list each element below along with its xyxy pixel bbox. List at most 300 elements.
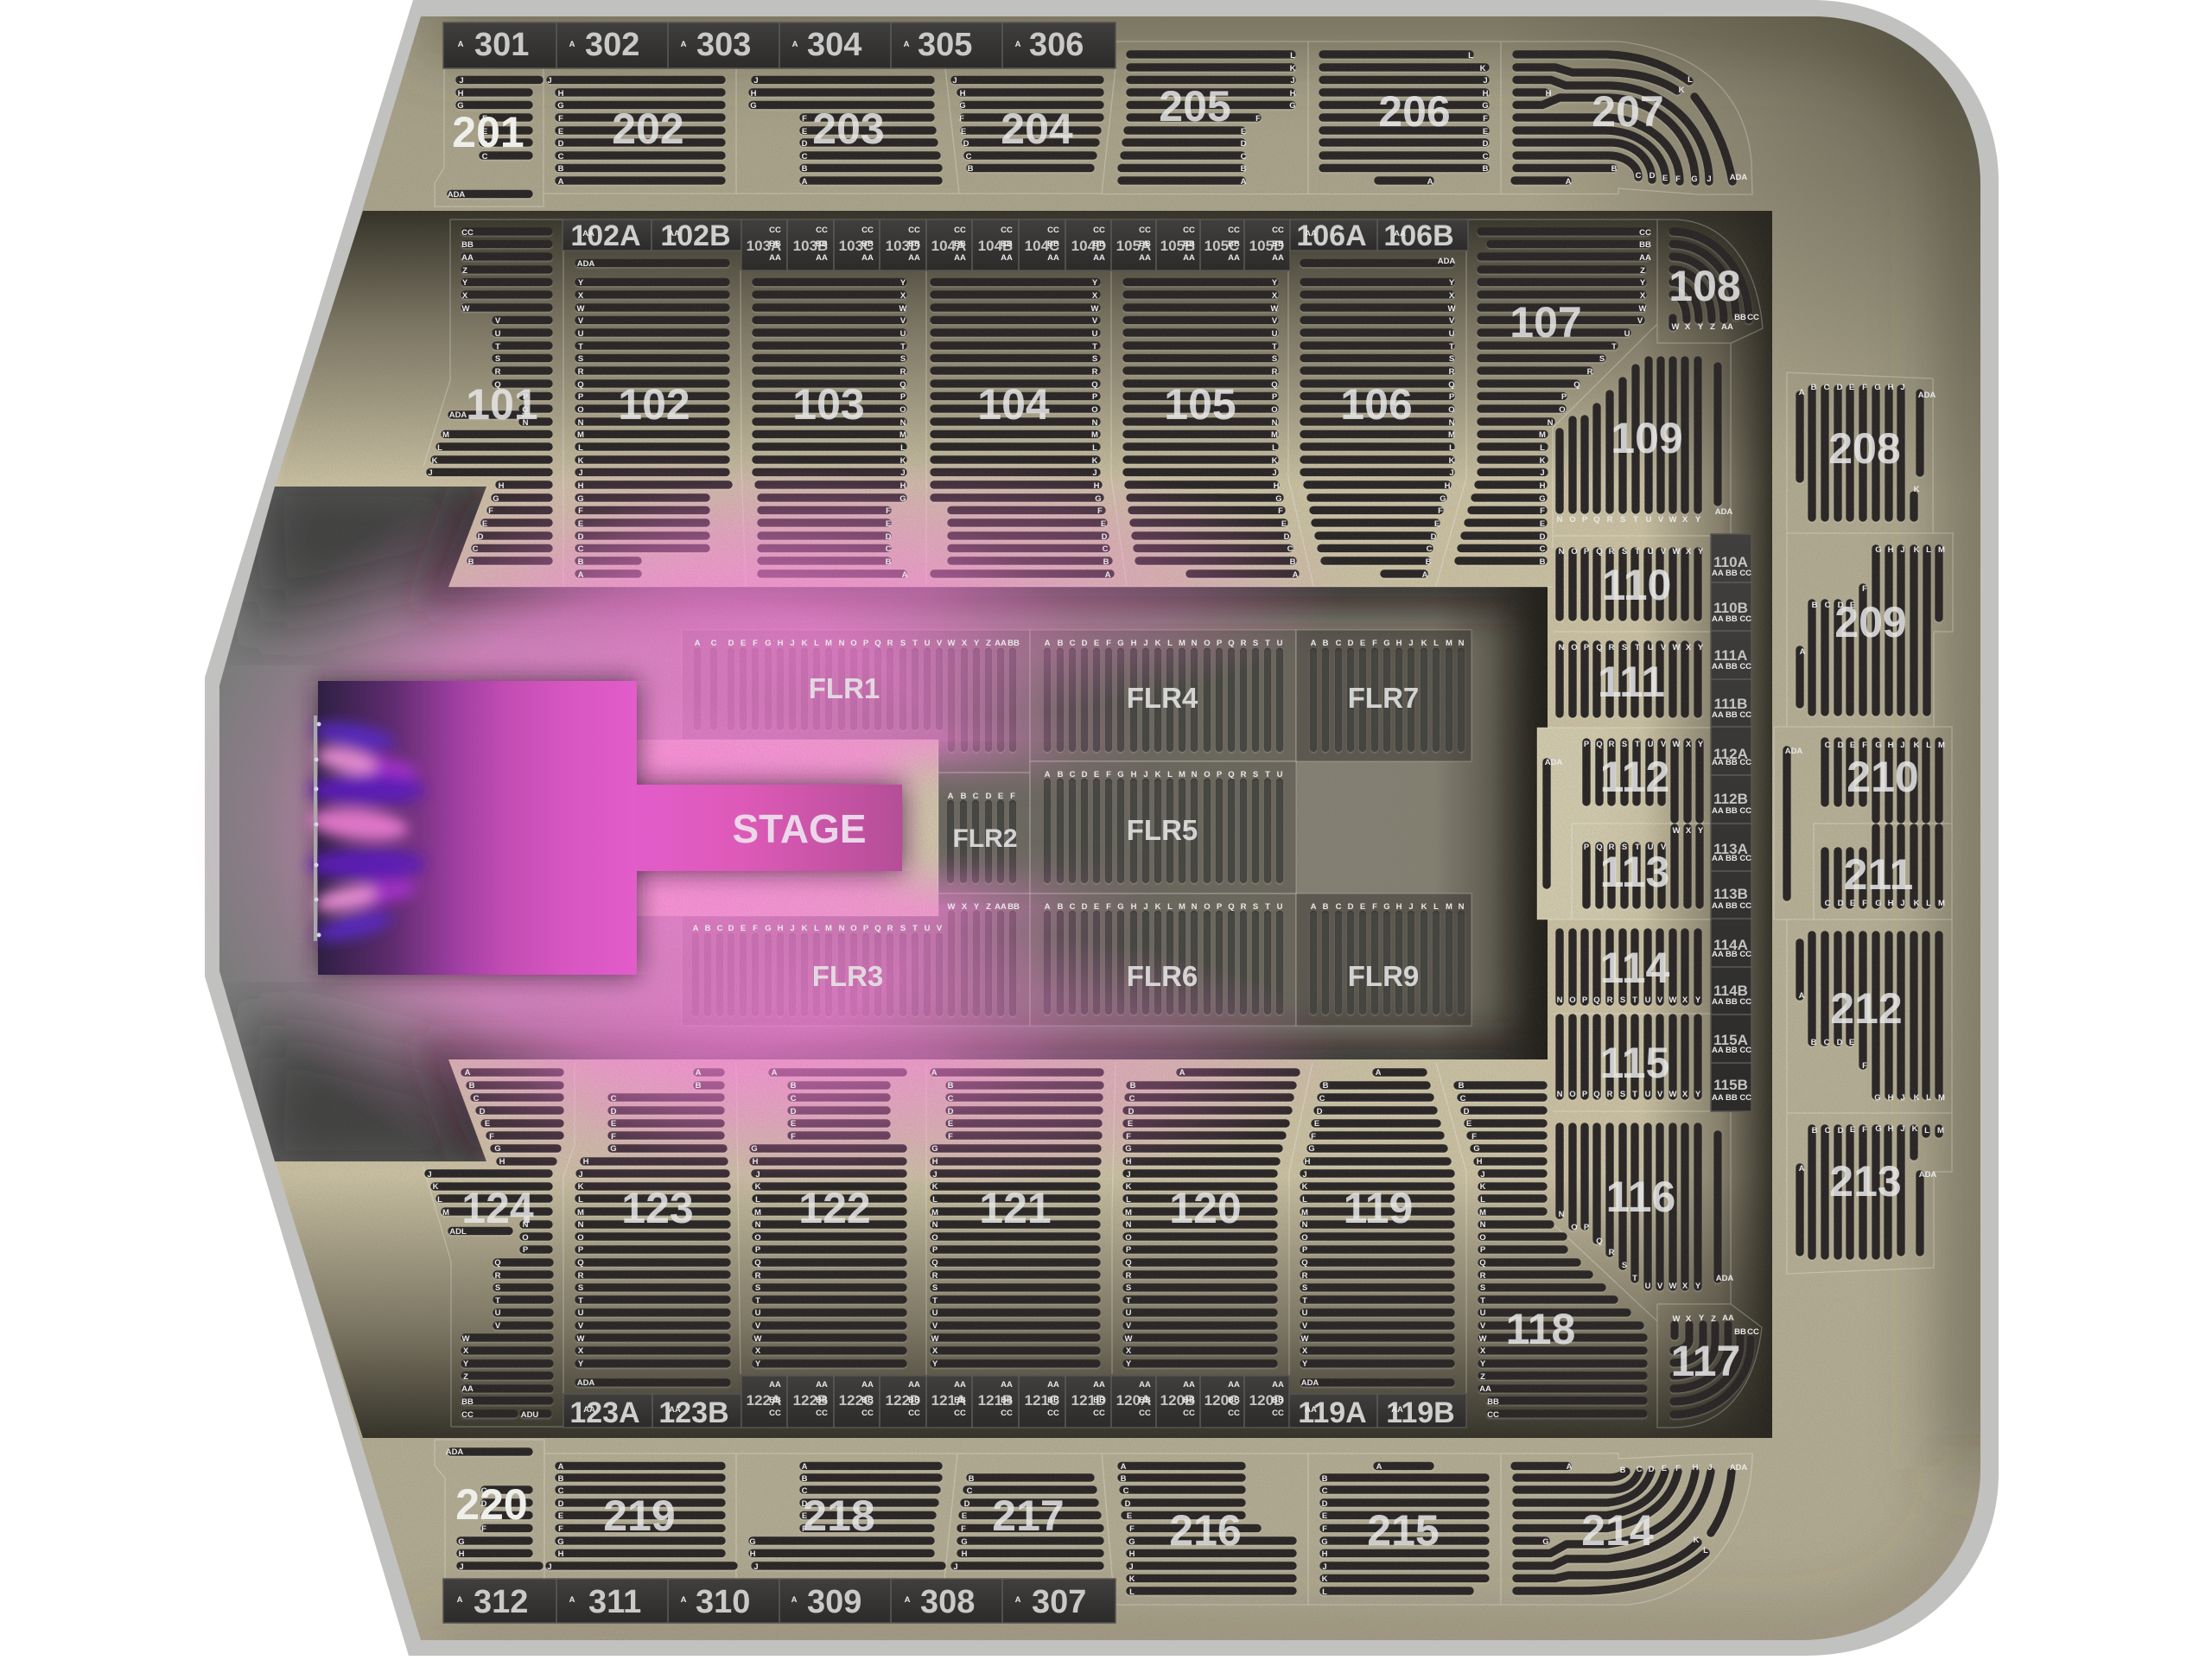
section numbers: 200 level: 220 [455,1480,528,1529]
section bar: 103A to 105D: BB [1272,239,1284,249]
rows: section 213 [1800,1129,1939,1256]
row letters: sections 108 to 116: ADA [1715,507,1732,517]
section bar: 122A to 120D: AA [1228,1380,1240,1390]
section bar: 103A to 105D: CC [1228,226,1240,235]
section bar: 103A to 105D: AA [816,253,828,263]
rows: FLR9 [1313,914,1461,1011]
section bar: 103A to 105D: BB [1047,239,1059,249]
section bar: 119A 119B: AA [1305,1405,1317,1415]
section bar: 122A to 120D: CC [1047,1409,1059,1418]
row letters: lower bowl 118 to 124: ABCDEFGHJKLMNOPQRSTUVWXY [751,1068,797,1369]
section bar: 307 to 312: 312 [474,1584,528,1620]
section bar: 307 to 312: 311 [588,1584,641,1620]
rows: section 211 [1825,828,1939,905]
rows: FLR5 [1047,782,1280,880]
section bar: 123A 123B: 123B [658,1396,729,1429]
row letters: sections 208 to 213: ABCDEFGHJKLM [1799,1124,1944,1174]
section bar: 103A to 105D: 105C [1205,238,1239,254]
row letters: upper 200 level: ADA [448,190,465,200]
row letters: lower bowl 118 to 124: ABCDEFGHJKLMNOPQRSTUVWXY [1125,1068,1185,1369]
section bar: 106A 106B: AA [1394,229,1406,239]
section numbers: 100 level: 103 [792,380,865,429]
row letters: sections 108 to 116: BB [1734,313,1746,322]
section numbers: 200 level: 207 [1592,87,1664,136]
section bar: 103A to 105D: AA [1228,253,1240,263]
section strip: 110A to 115B: AA BB CC [1712,997,1751,1007]
section bar: 122A to 120D: CC [1183,1409,1195,1418]
row letters: floor sections: WXYZ [948,902,991,912]
row letters: floor sections: ABCDEFGHJKLMNOPQRSTU [1045,639,1283,648]
section numbers: 100 level: 121 [979,1184,1052,1232]
section numbers: 100 level: 107 [1510,298,1582,347]
section numbers: 200 level: 213 [1829,1157,1902,1205]
section numbers: 200 level: 214 [1581,1506,1654,1555]
section strip: 110A to 115B: AA BB CC [1712,806,1751,816]
section numbers: 100 level: 112 [1600,753,1669,801]
section bar: 122A to 120D: BB [1047,1396,1059,1405]
section bar: 122A to 120D: CC [1001,1409,1013,1418]
floor section labels: FLR4 [1127,682,1198,714]
pink stage light wash [190,445,1348,1205]
row letters: lower 200 level: ABCDEFGHJKL [1542,1462,1713,1555]
row letters: upper bowl 101 to 107: CC [1639,228,1651,238]
row letters: lower bowl 118 to 124: ADU [521,1410,538,1420]
row letters: lower bowl 118 to 124: ADA [1301,1378,1319,1388]
section bar: 103A to 105D: 104A [931,238,966,254]
rows: section 107 [1459,232,1646,561]
section bar: 301 to 306: 303 [696,27,751,63]
section bar: 122A to 120D: AA [1139,1380,1151,1390]
row letters: floor sections: ABCDEFGHJKLMNOPQRSTU [1045,902,1283,912]
row letters: floor sections: ABCDEFGHJKLMN [1311,902,1465,912]
arena floor [219,458,1548,1189]
section bar: 122A to 120D: 122B [793,1392,828,1409]
row letters: upper bowl 101 to 107: ADA [449,410,467,420]
section bar: 122A to 120D: AA [769,1380,781,1390]
rows: FLR4 [1047,652,1280,748]
section numbers: 200 level: 218 [803,1492,875,1540]
rows: section 218 [753,1466,942,1566]
rows: section 214 [1515,1466,1732,1591]
row letters: lower bowl 118 to 124: BB [461,1397,474,1407]
section bar: 103A to 105D: BB [816,239,828,249]
section strip: 110A to 115B: AA BB CC [1712,854,1751,863]
row letters: lower 200 level: ABCDEFGHJKL [1321,1462,1382,1597]
rows: section 103 [756,282,903,574]
row letters: sections 208 to 213: ADA [1785,747,1802,756]
section bar: 301 to 306: AAAAAA [458,40,1021,49]
seating bowl shadow [259,211,1780,1438]
row letters: upper bowl 101 to 107: CC [461,228,474,238]
row letters: upper 200 level: LKJHGFEDCBA [1546,75,1712,187]
section numbers: 100 level: 123 [621,1184,694,1232]
rows: section 108 [1673,232,1749,327]
section bar: 103A to 105D: AA [1272,253,1284,263]
section strip: 110A to 115B: AA BB CC [1712,710,1751,720]
section bar: 122A to 120D: CC [1272,1409,1284,1418]
section bar: 123A 123B: AA [583,1405,595,1415]
section numbers: 100 level: 106 [1340,380,1413,429]
section bar: 301 to 306: 301 [474,27,529,63]
section bar: 106A 106B: AA [1305,229,1317,239]
row letters: lower bowl 118 to 124: ABCDEFGHJKLMNOPQRSTUVWXY [1301,1068,1382,1369]
section numbers: 200 level: 217 [992,1492,1065,1540]
rows: section 121 [934,1072,1100,1364]
rows: section 116 [1560,1127,1718,1287]
rows: section 201 [451,80,539,194]
row letters: upper bowl 101 to 107: AA [461,253,474,263]
section strip: 110A to 115B: 111A [1714,647,1747,664]
rows: section 123 [579,1072,727,1383]
row letters: upper bowl 101 to 107 [428,228,1651,580]
section bar: 103A to 105D: AA [954,253,966,263]
floor section labels: FLR3 [812,960,883,992]
rows: section 114 [1560,932,1698,1002]
row letters: upper bowl 101 to 107: ZYXWVUTSRQPONMLKJHGFEDCB [428,266,529,567]
section bar: 103A to 105D: 104C [1025,238,1059,254]
section bar: 122A to 120D: BB [816,1396,828,1405]
section strip: 110A to 115B [1711,534,1751,1111]
section numbers: 200 level: 215 [1367,1506,1440,1555]
section numbers: 200 level: 219 [603,1492,676,1540]
section bar: 122A to 120D: CC [861,1409,874,1418]
row letters: floor sections: AA [995,902,1007,912]
rows: section 109 [1560,360,1718,510]
rows: section 217 [955,1478,1100,1566]
rows: section 119 [1304,1072,1451,1383]
row letters: sections 108 to 116: WXYZ [1673,1314,1716,1324]
rows: section 209 [1800,549,1939,712]
section bar: 119A 119B [1289,1394,1466,1429]
section bar: 103A to 105D: 104D [1071,238,1106,254]
section numbers: 200 level [452,82,1919,1555]
section bar: 301 to 306: 306 [1029,27,1084,63]
rows: section 203 [753,80,938,181]
section bar: 103A to 105D: BB [1093,239,1105,249]
section outlines [423,41,1953,1605]
section bar: 307 to 312: 307 [1032,1584,1086,1620]
row letters: upper 200 level: ADA [1730,173,1747,182]
section strip: 110A to 115B: 113B [1713,886,1748,902]
section bar: 119A 119B: 119B [1386,1396,1455,1429]
row letters: floor sections: ABCDEFGHJKLMNOPQRSTUV [693,924,943,933]
rows: section 113 [1586,828,1700,905]
rows: section 205 [1122,54,1292,181]
section strip: 110A to 115B: AA BB CC [1712,1046,1751,1055]
row letters: floor sections: BB [1007,902,1020,912]
section numbers: 100 level: 104 [977,380,1050,429]
section bar: 307 to 312: 308 [920,1584,975,1620]
floor section labels: FLR1 [809,672,880,704]
rows: section 208 [1800,389,1920,518]
section bar: 119A 119B: 119A [1298,1396,1367,1429]
row letters: upper bowl 101 to 107: ADA [1438,257,1455,266]
section numbers: 200 level: 206 [1378,87,1451,136]
row letters: upper bowl 101 to 107: ZYXWVUTSRQPONMLKJHGFEDCB [1539,266,1647,567]
section bar: 122A to 120D [741,1376,1289,1428]
section numbers: 100 level: 115 [1600,1039,1669,1087]
rows: section 212 [1800,935,1939,1096]
section bar: 103A to 105D: CC [769,226,781,235]
section bar: 122A to 120D: BB [1228,1396,1240,1405]
section bar: 307 to 312: AAAAAA [457,1595,1021,1605]
row letters: lower 200 level: CDEFGHJ [458,1486,487,1572]
section bar: 307 to 312: 310 [696,1584,750,1620]
section bar: 103A to 105D: AA [861,253,874,263]
section bar: 102A 102B: AA [582,229,594,239]
ring panel behind sections 112 and 113 [1537,728,1711,919]
row letters: lower 200 level: BCDEFGHJ [953,1474,975,1572]
row letters: lower 200 level: ADA [446,1447,463,1457]
row letters: lower 200 level: ABCDEFGHJ [547,1462,564,1572]
rows: section 122 [753,1072,903,1364]
section bar: 103A to 105D: CC [1183,226,1195,235]
rows: section 210 [1787,741,1939,897]
section numbers: 200 level: 208 [1828,424,1901,473]
rows: section 110 [1560,551,1698,617]
rows: section 115 [1560,1018,1698,1096]
section bar: 122A to 120D: AA [1001,1380,1013,1390]
section numbers: 100 level: 119 [1344,1184,1413,1232]
section bar: 103A to 105D: CC [861,226,874,235]
row letters: lower 200 level: ADA [1730,1463,1747,1473]
row letters: lower bowl 118 to 124: AA [1479,1384,1491,1394]
row letters: sections 108 to 116: NOPQRSTUVWXY [1559,547,1704,557]
section numbers: 100 level: 108 [1669,262,1741,310]
floor section labels: FLR9 [1348,960,1419,992]
section bar: 103A to 105D: CC [1139,226,1151,235]
rows: section 101 [430,232,549,561]
stage [318,681,902,975]
rows: section 216 [1122,1466,1293,1591]
section bar: 122A to 120D: 122C [839,1392,874,1409]
section bar: 123A 123B: 123A [569,1396,640,1429]
rows: section 202 [550,80,721,181]
row letters: sections 108 to 116 [1545,313,1759,1337]
section bar: 122A to 120D: 120A [1116,1392,1151,1409]
section bar: 122A to 120D: BB [1139,1396,1151,1405]
row letters: sections 108 to 116: NOPQRSTUVWXY [1559,1210,1701,1291]
section bar: 122A to 120D: BB [954,1396,966,1405]
section bar: 103A to 105D: AA [769,253,781,263]
row letters: upper bowl 101 to 107: YXWVUTSRQPONMLKJHGFEDCBA [886,278,908,580]
section bar: 103A to 105D [741,219,1290,270]
section bar: 122A to 120D: BB [908,1396,920,1405]
row letters: sections 108 to 116: AA [1721,322,1733,332]
floor section labels: FLR6 [1127,960,1198,992]
row letters: upper bowl 101 to 107: YXWVUTSRQPONMLKJHGFEDCBA [1271,278,1299,580]
section strip: 110A to 115B: AA BB CC [1712,1093,1751,1103]
row letters: lower bowl 118 to 124: AA [461,1384,474,1394]
row letters: upper bowl 101 to 107: AA [1639,253,1651,263]
section bar: 122A to 120D: CC [1139,1409,1151,1418]
row letters: floor sections: ABCDEF [948,792,1015,801]
rows: section 219 [550,1466,734,1566]
rows: FLR3 [696,914,1013,1013]
floor section labels: FLR5 [1127,814,1198,846]
section bar: 122A to 120D: CC [1093,1409,1105,1418]
section numbers: 200 level: 209 [1834,598,1907,646]
section bar: 301 to 306: 302 [585,27,639,63]
section numbers: 200 level: 211 [1844,850,1913,899]
row letters: lower bowl 118 to 124: ADL [449,1227,467,1237]
section strip: 110A to 115B: AA BB CC [1712,950,1751,959]
section bar: 122A to 120D: AA [1047,1380,1059,1390]
section bar: 102A 102B [563,219,741,252]
floor section panels [682,630,1471,1026]
section numbers: 200 level: 203 [812,105,885,153]
section strip: 110A to 115B: AA BB CC [1712,662,1751,671]
section bar: 301 to 306: 305 [918,27,972,63]
section bar: 122A to 120D: BB [861,1396,874,1405]
section strip: 110A to 115B: AA BB CC [1712,758,1751,767]
section bar: 103A to 105D: CC [954,226,966,235]
floor section labels [809,672,1419,992]
section strip: 110A to 115B: AA BB CC [1712,901,1751,911]
row letters: sections 208 to 213: CDEFGHJKLM [1825,741,1945,750]
section bar: 103A to 105D: 104B [978,238,1013,254]
rows: section 104 [934,282,1110,574]
rows: section 120 [1127,1072,1296,1364]
row letters: lower bowl 118 to 124: ADA [577,1378,594,1388]
row letters: sections 208 to 213: ADA [1919,1170,1936,1180]
section bar: 103A to 105D: 103C [839,238,874,254]
section bar: 103A to 105D: 105B [1160,238,1195,254]
section bar: 122A to 120D: BB [1272,1396,1284,1405]
section numbers: 100 level: 117 [1671,1337,1740,1385]
section numbers: 200 level: 201 [452,108,524,156]
section bar: 122A to 120D: 122D [886,1392,920,1409]
row letters: lower 200 level: ABCDEFGHJKL [1121,1462,1135,1597]
section bar: 301 to 306 [443,22,1116,68]
section numbers: 200 level: 210 [1847,753,1919,801]
stage light rig [314,716,321,941]
row letters: lower bowl 118 to 124: BB [1487,1397,1499,1407]
rows: FLR1 [697,652,1013,748]
section strip: 110A to 115B: 112A [1713,746,1748,762]
section bar: 122A to 120D: AA [1183,1380,1195,1390]
row letters: sections 108 to 116: WXYPQRSTUV [1584,826,1704,852]
section numbers: 100 level: 114 [1600,944,1670,992]
rows: section 204 [955,80,1100,168]
row letters: upper 200 level: JHGFEDCB [952,76,974,174]
row letters: sections 208 to 213: ADA [1918,391,1936,400]
row letters: upper bowl 101 to 107: BB [461,240,474,250]
section numbers: 100 level [461,262,1741,1385]
section numbers: 200 level: 216 [1169,1506,1242,1555]
section bar: 103A to 105D: CC [1272,226,1284,235]
section bar: 103A to 105D: 103B [793,238,828,254]
section bar: 106A 106B: 106A [1296,219,1367,252]
row letters: floor sections: ACDEFGHJKLMNOPQRSTUVWXYZ [695,639,991,648]
row letters: lower bowl 118 to 124: CC [461,1410,474,1420]
section numbers: 100 level: 118 [1506,1305,1575,1353]
row letters: upper bowl 101 to 107: BB [1639,240,1651,250]
section bar: 103A to 105D: CC [1093,226,1105,235]
row letters: upper bowl 101 to 107: YXWVUTSRQPONMLKJHGFEDCBA [577,278,585,580]
section strip: 110A to 115B: 111B [1714,696,1747,712]
section bar: 122A to 120D: BB [1183,1396,1195,1405]
row letters: sections 108 to 116: NOPQRSTUVWXY [1559,643,1704,652]
section bar: 103A to 105D: AA [908,253,920,263]
rows: section 112 [1547,742,1700,885]
row letters: floor sections: ABCDEFGHJKLMNOPQRSTU [1045,770,1283,779]
stage light beams [307,717,426,947]
section bar: 103A to 105D: 103A [747,238,781,254]
section bar: 122A to 120D: CC [1228,1409,1240,1418]
section numbers: 200 level: 212 [1830,984,1903,1033]
row letters: lower 200 level: ABCDEFGHJ [749,1462,808,1572]
section bar: 103A to 105D: AA [1047,253,1059,263]
section bar: 307 to 312 [443,1579,1116,1623]
row letters: lower bowl 118 to 124 [427,1068,1499,1420]
section strip: 110A to 115B: 115A [1713,1032,1748,1048]
section bar: 106A 106B [1290,219,1468,252]
section bar: 119A 119B: AA [1391,1405,1403,1415]
section bar: 103A to 105D: BB [908,239,920,249]
rows: section 118 [1458,1085,1643,1414]
section bar: 122A to 120D: AA [1272,1380,1284,1390]
row letters: floor sections: ABCDEFGHJKLMN [1311,639,1465,648]
section bar: 122A to 120D: 122A [747,1392,781,1409]
row letters: upper bowl 101 to 107: YXWVUTSRQPONMLKJHGFEDCBA [1422,278,1456,580]
row letters: lower bowl 118 to 124: ABCDEFGHJKLMNOPQRSTUVWXY [931,1068,954,1369]
row letters: sections 208 to 213: ABCDEFGHJKLM [1800,545,1945,657]
section strip: 110A to 115B: 112B [1713,791,1748,807]
section bar: 103A to 105D: BB [861,239,874,249]
section bar: 122A to 120D: 121A [931,1392,966,1409]
row letters: upper 200 level: LKJHGFEDCBA [1427,51,1489,187]
row letters: sections 108 to 116: AA [1722,1314,1734,1323]
section bar: 102A 102B: AA [668,229,680,239]
section bar: 103A to 105D: BB [954,239,966,249]
section numbers: 100 level: 116 [1606,1173,1675,1221]
section numbers: 100 level: 111 [1598,658,1665,706]
section numbers: 100 level: 122 [798,1184,871,1232]
row letters: lower bowl 118 to 124: ABCDEFGHJKLMNOPQRSTUVWXYZ [427,1068,529,1382]
rows: section 106 [1304,263,1451,574]
rows: section 102 [579,263,728,574]
rows: section 207 [1515,54,1732,181]
floor section labels: FLR2 [952,824,1018,853]
row letters: lower bowl 118 to 124: CC [1487,1410,1499,1420]
section bar: 102A 102B: 102B [660,219,731,252]
section bar: 122A to 120D: AA [816,1380,828,1390]
stage shadow [318,681,902,975]
section numbers: 100 level: 120 [1169,1184,1242,1232]
row letters: floor sections [693,639,1465,933]
section numbers: 100 level: 109 [1611,414,1683,462]
row letters: upper bowl 101 to 107: YXWVUTSRQPONMLKJHGFEDCBA [1091,278,1111,580]
section bar: 122A to 120D: 120D [1249,1392,1284,1409]
rows: section 105 [1127,282,1295,574]
section strip: 110A to 115B: AA BB CC [1712,614,1751,624]
section bar: 307 to 312: 309 [807,1584,861,1620]
section bar: 103A to 105D: 103D [886,238,920,254]
rows: section 206 [1323,54,1485,181]
section bar: 123A 123B [563,1394,741,1429]
section numbers: 100 level: 105 [1164,380,1236,429]
section bar: 122A to 120D: 120B [1160,1392,1195,1409]
rows: section 215 [1324,1466,1485,1591]
section numbers: 200 level: 205 [1159,82,1231,130]
section numbers: 200 level: 202 [612,105,684,153]
row letters: sections 208 to 213 [1785,383,1945,1180]
section bar: 106A 106B: 106B [1383,219,1454,252]
section bar: 103A to 105D: BB [1228,239,1240,249]
floor section labels: FLR7 [1348,682,1419,714]
section bar: 122A to 120D: BB [1001,1396,1013,1405]
